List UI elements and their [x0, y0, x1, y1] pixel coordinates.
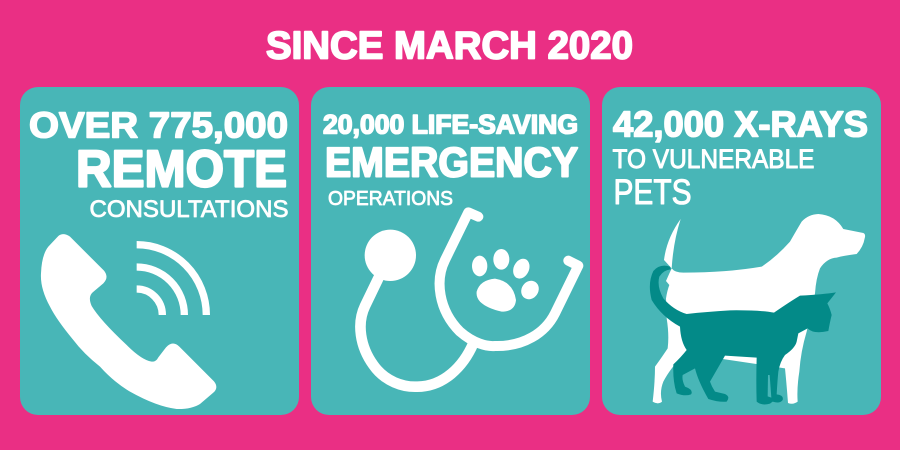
card background [602, 87, 881, 415]
heading: 20,000 life-saving: 20,000 LIFE-SAVING [323, 110, 578, 140]
panel: x-rays to vulnerable pets [602, 87, 881, 415]
icon: stethoscope with paw [360, 212, 578, 387]
heading: remote: REMOTE [76, 140, 287, 198]
dog silhouette [653, 214, 865, 404]
heading: emergency: EMERGENCY [325, 138, 578, 186]
heading: 42,000 x-rays: 42,000 X-RAYS [613, 104, 868, 144]
text: operations: OPERATIONS [328, 187, 453, 210]
icon: telephone with signal waves [41, 234, 216, 409]
card background [20, 87, 299, 415]
title: SINCE MARCH 2020 [266, 24, 633, 68]
icon: dog and cat silhouettes [650, 214, 865, 404]
heading: over 775,000: OVER 775,000 [29, 104, 288, 146]
card background [311, 87, 590, 415]
cat leg gap [768, 375, 771, 398]
panel: emergency operations [311, 87, 590, 415]
cat silhouette [650, 266, 836, 404]
text: pets: PETS [614, 173, 692, 212]
text: consultations: CONSULTATIONS [90, 196, 288, 223]
panel: remote consultations [20, 87, 299, 415]
text: to vulnerable: TO VULNERABLE [612, 144, 814, 174]
